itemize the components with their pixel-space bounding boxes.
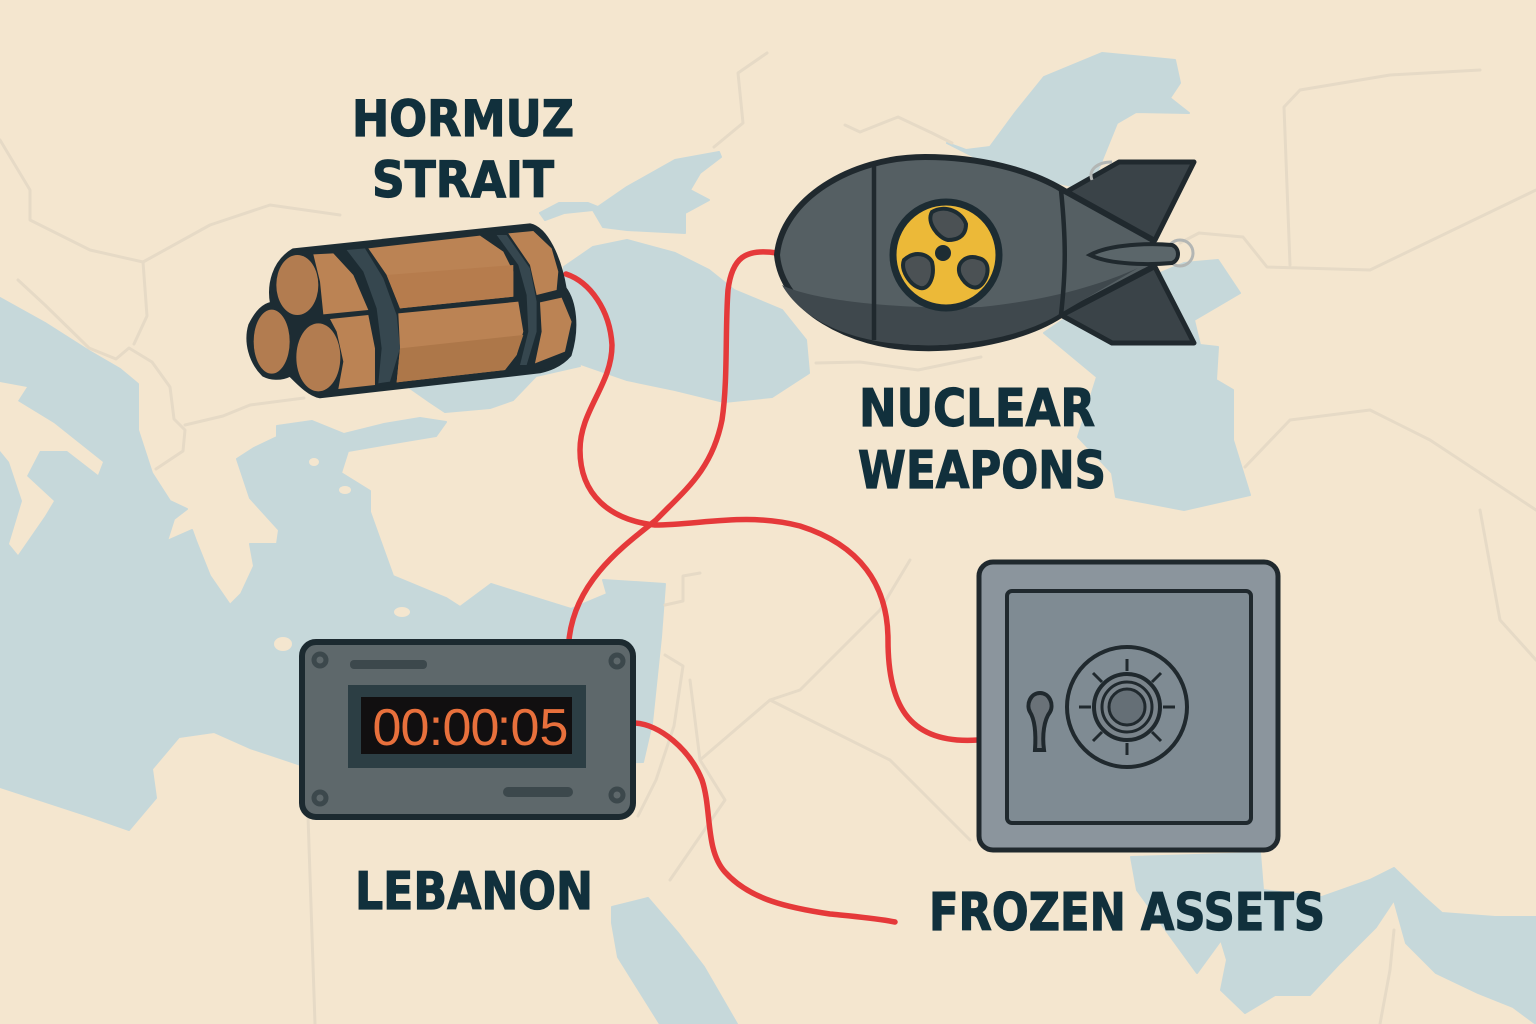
timer digits: 00:00:05 (373, 699, 568, 757)
label: Frozen Assets: FROZEN ASSETS (929, 883, 1325, 943)
icon: nuclear bomb (777, 157, 1194, 348)
icon: radiation symbol (893, 202, 999, 308)
label: Lebanon: LEBANON (355, 862, 593, 922)
safe dial (1067, 647, 1187, 767)
label: Hormuz Strait: STRAIT (372, 151, 554, 209)
icon: safe (979, 562, 1278, 850)
label: Hormuz Strait (352, 90, 574, 209)
icon: timer box (302, 642, 633, 817)
timer screws (314, 654, 623, 804)
bomb tail fins (1061, 162, 1194, 343)
safe keyhole (1028, 693, 1052, 750)
label: Nuclear Weapons: NUCLEAR (859, 379, 1095, 439)
label: Hormuz Strait: HORMUZ (352, 90, 574, 148)
red wires (566, 252, 978, 922)
icon: dynamite (248, 225, 575, 397)
label: Nuclear Weapons: WEAPONS (858, 441, 1106, 501)
land: Italy and islands (0, 382, 410, 651)
label: Nuclear Weapons (858, 379, 1106, 501)
